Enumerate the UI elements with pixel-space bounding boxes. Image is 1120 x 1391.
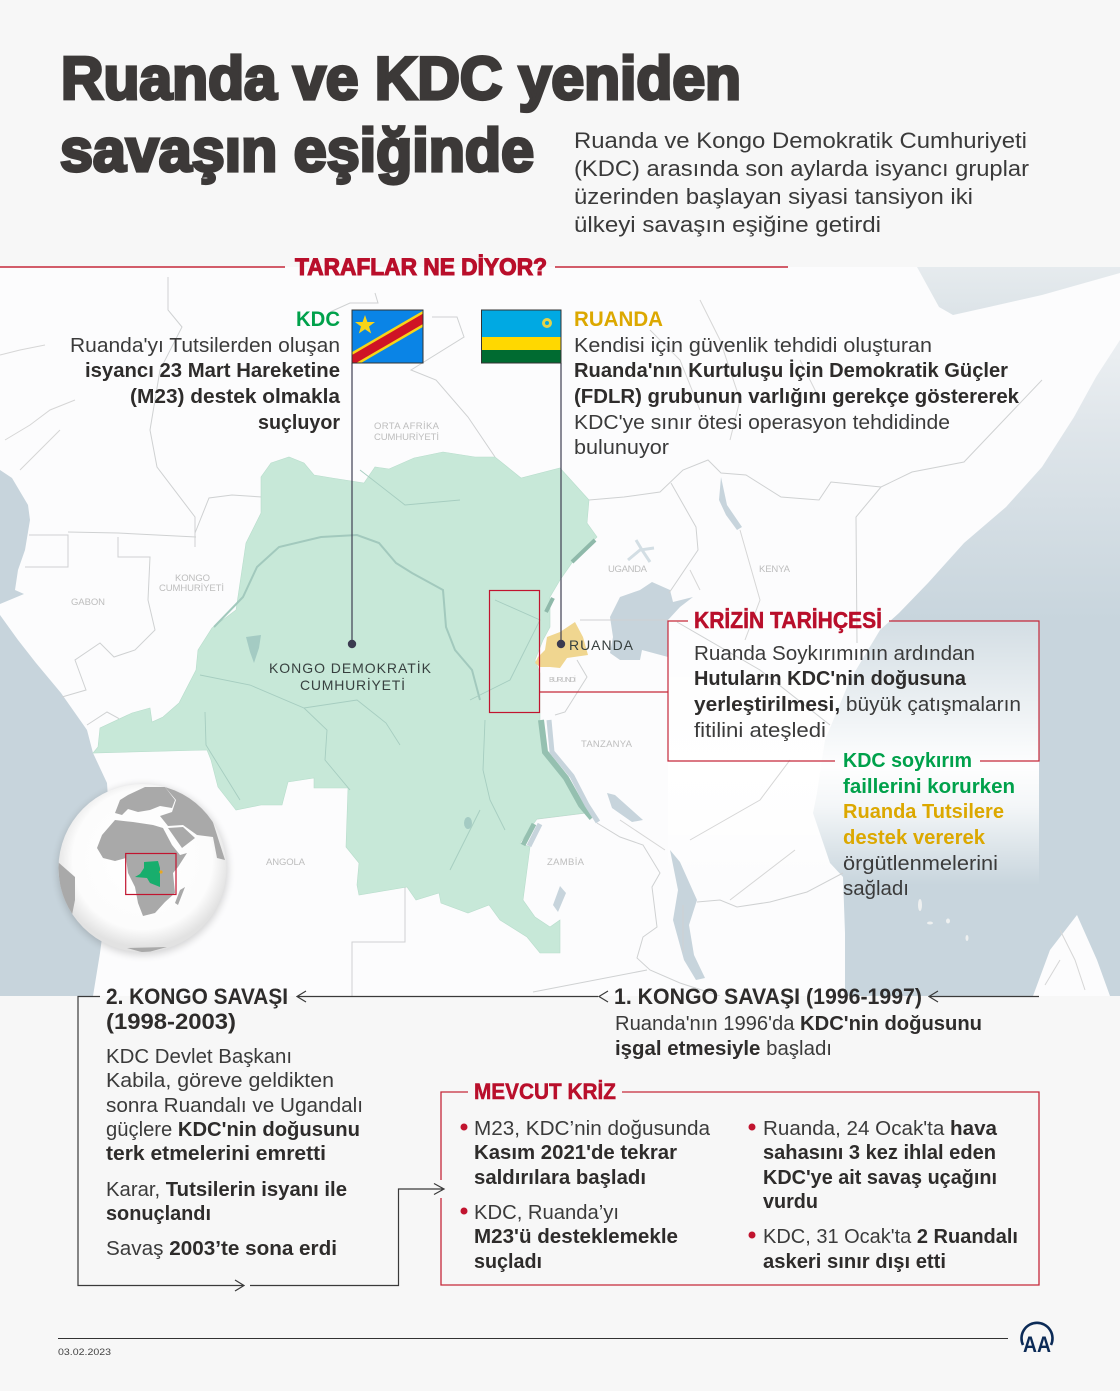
text block: KDC statement xyxy=(70,308,341,434)
sea: Indian Ocean xyxy=(813,340,1120,996)
text block: second Congo war: (1998-2003) xyxy=(106,1009,236,1034)
highlight rectangle: eastern KDC xyxy=(490,590,540,712)
bullet: M23: Kasım 2021'de tekrar xyxy=(474,1142,677,1164)
panel: crisis history xyxy=(540,607,1039,900)
Africa xyxy=(97,820,187,916)
text block: second Congo war: 2. KONGO SAVAŞI xyxy=(106,984,288,1009)
bullet: Ruanda airspace: sahasını 3 kez ihlal eden xyxy=(763,1142,996,1164)
bullet: Ruanda airspace xyxy=(748,1118,998,1213)
bottom background xyxy=(0,996,1120,1391)
body text: fitilini ateşledi xyxy=(694,720,826,742)
map labels: TANZANYA xyxy=(581,739,633,750)
subtitle: Ruanda ve Kongo Demokratik Cumhuriyeti xyxy=(574,128,1027,153)
bullet: KDC accusation: KDC, Ruanda’yı xyxy=(474,1202,619,1224)
Arabia xyxy=(168,827,195,848)
body text xyxy=(694,643,1021,742)
map labels: UGANDA xyxy=(608,564,648,575)
text block: second Congo war xyxy=(106,984,363,1260)
text block: Ruanda statement: Kendisi için güvenlik tehdidi oluşturan xyxy=(574,335,932,357)
bullet: KDC accusation: M23'ü desteklemekle xyxy=(474,1226,678,1248)
panel: current crisis xyxy=(441,1079,1039,1285)
map labels: KONGO DEMOKRATİK xyxy=(269,659,432,676)
bullet: KDC expulsion: KDC, 31 Ocak'ta 2 Ruandalı xyxy=(763,1226,1018,1248)
body text: Hutuların KDC'nin doğusuna xyxy=(694,668,967,690)
Lake Tanganyika xyxy=(541,720,592,818)
sea: Atlantic Ocean xyxy=(0,615,112,996)
bullet: Ruanda airspace: Ruanda, 24 Ocak'ta hava xyxy=(763,1118,998,1140)
title xyxy=(60,45,741,184)
bullet: KDC accusation xyxy=(460,1202,678,1273)
text block: first Congo war xyxy=(614,984,982,1060)
map labels: KONGO xyxy=(175,573,210,584)
coloured note: destek vererek xyxy=(843,827,986,849)
text block: Ruanda statement: RUANDA xyxy=(574,308,663,331)
map labels xyxy=(71,421,791,868)
text block: second Congo war: güçlere KDC'nin doğusunu xyxy=(106,1119,360,1141)
subtitle xyxy=(574,128,1029,237)
text block: Ruanda statement xyxy=(574,308,1020,459)
heading: MEVCUT KRİZ xyxy=(474,1079,616,1104)
text block: second Congo war: terk etmelerini emretti xyxy=(106,1143,326,1165)
coloured note: sağladı xyxy=(843,878,909,900)
map: Central and East Africa xyxy=(0,267,1120,997)
text block: KDC statement: isyancı 23 Mart Hareketine xyxy=(85,360,340,382)
subtitle: ülkeyi savaşın eşiğine getirdi xyxy=(574,212,881,237)
flag pole: KDC xyxy=(348,363,356,648)
body text: Ruanda Soykırımının ardından xyxy=(694,643,975,665)
sea: Gulf of Guinea xyxy=(0,470,30,604)
country borders xyxy=(25,277,1042,997)
title: savaşın eşiğinde xyxy=(60,117,534,184)
text block: first Congo war: Ruanda'nın 1996'da KDC'nin doğusunu xyxy=(615,1013,982,1035)
map labels: ORTA AFRİKA xyxy=(374,421,440,432)
bullet: KDC expulsion: askeri sınır dışı etti xyxy=(763,1251,946,1273)
text block: Ruanda statement: (FDLR) grubunun varlığını gerekçe göstererek xyxy=(574,386,1020,408)
text block: KDC statement: (M23) destek olmakla xyxy=(130,386,341,408)
bullet: M23 xyxy=(460,1118,711,1189)
country: Democratic Republic of Congo xyxy=(93,452,598,953)
text block: Ruanda statement: KDC'ye sınır ötesi operasyon tehdidinde xyxy=(574,412,950,434)
map labels: ANGOLA xyxy=(266,857,306,868)
text block: KDC statement: Ruanda'yı Tutsilerden oluşan xyxy=(70,335,340,357)
text block: second Congo war: Kabila, göreve geldikten xyxy=(106,1070,334,1092)
map labels: CUMHURİYETİ xyxy=(300,676,405,693)
South America xyxy=(58,862,75,914)
logo: AA: AA xyxy=(1023,1332,1051,1357)
bullet: Ruanda airspace: vurdu xyxy=(763,1191,818,1213)
timeline arrows xyxy=(78,991,1039,1291)
coloured note: örgütlenmelerini xyxy=(843,853,998,875)
text block: second Congo war: Karar, Tutsilerin isyanı ile xyxy=(106,1179,347,1201)
text block: Ruanda statement: Ruanda'nın Kurtuluşu İçin Demokratik Güçler xyxy=(574,359,1008,382)
rivers xyxy=(200,470,540,870)
bullet: KDC expulsion xyxy=(748,1226,1018,1273)
country: Rwanda xyxy=(535,622,588,668)
text block: first Congo war: işgal etmesiyle başladı xyxy=(615,1038,832,1060)
map labels: CUMHURİYETİ xyxy=(374,432,439,443)
text block: second Congo war: Savaş 2003’te sona erdi xyxy=(106,1238,337,1260)
coloured note: Ruanda Tutsilere xyxy=(843,801,1004,823)
flag pole: Ruanda xyxy=(557,363,565,648)
coloured note: KDC soykırım xyxy=(843,750,972,772)
map labels: RUANDA xyxy=(569,637,634,653)
panel fade behind history text xyxy=(668,621,1039,885)
subtitle: (KDC) arasında son aylarda isyancı gruplar xyxy=(574,156,1029,181)
flag: Ruanda xyxy=(482,310,561,363)
DRC on globe xyxy=(135,861,160,887)
lakes xyxy=(553,477,742,980)
bullet: Ruanda airspace: KDC'ye ait savaş uçağını xyxy=(763,1167,997,1189)
map labels: BURUNDİ xyxy=(549,675,576,684)
Asia xyxy=(160,787,225,860)
bullet: KDC accusation: suçladı xyxy=(474,1251,542,1273)
coloured note: faillerini korurken xyxy=(843,776,1015,798)
Lake Mweru xyxy=(523,824,534,845)
map labels: KENYA xyxy=(759,564,791,575)
Lake Albert xyxy=(572,540,595,562)
body text: yerleştirilmesi, büyük çatışmaların xyxy=(694,694,1021,716)
sea: Gulf of Aden xyxy=(917,267,1120,315)
Europe xyxy=(115,787,175,815)
map labels: GABON xyxy=(71,597,105,608)
Madagascar xyxy=(175,887,185,905)
text block: second Congo war: sonra Ruandalı ve Ugandalı xyxy=(106,1095,363,1117)
text block: KDC statement: suçluyor xyxy=(258,412,340,434)
flag: DRC xyxy=(352,310,424,364)
coloured note xyxy=(843,750,1015,900)
locator globe xyxy=(58,784,228,955)
bullet: M23: M23, KDC’nin doğusunda xyxy=(474,1118,711,1140)
text block: second Congo war: KDC Devlet Başkanı xyxy=(106,1046,292,1068)
bullet: M23: saldırılara başladı xyxy=(474,1167,646,1189)
map labels: ZAMBİA xyxy=(547,857,585,868)
logo: AA xyxy=(1022,1323,1052,1357)
footer line and date: 03.02.2023 xyxy=(58,1347,111,1358)
text block: first Congo war: 1. KONGO SAVAŞI (1996-1997) xyxy=(614,984,922,1009)
Antarctica xyxy=(128,947,166,952)
title: Ruanda ve KDC yeniden xyxy=(61,45,741,112)
islands xyxy=(918,899,968,941)
text block: KDC statement: KDC xyxy=(296,308,340,331)
terrain lines xyxy=(0,300,1085,990)
heading: KRİZİN TARİHÇESİ xyxy=(694,607,882,633)
section heading: Taraflar ne diyor: TARAFLAR NE DİYOR? xyxy=(295,254,547,281)
subtitle: üzerinden başlayan siyasi tansiyon iki xyxy=(574,184,973,209)
map labels: CUMHURİYETİ xyxy=(159,583,224,594)
text block: second Congo war: sonuçlandı xyxy=(106,1203,211,1225)
text block: Ruanda statement: bulunuyor xyxy=(574,437,669,459)
